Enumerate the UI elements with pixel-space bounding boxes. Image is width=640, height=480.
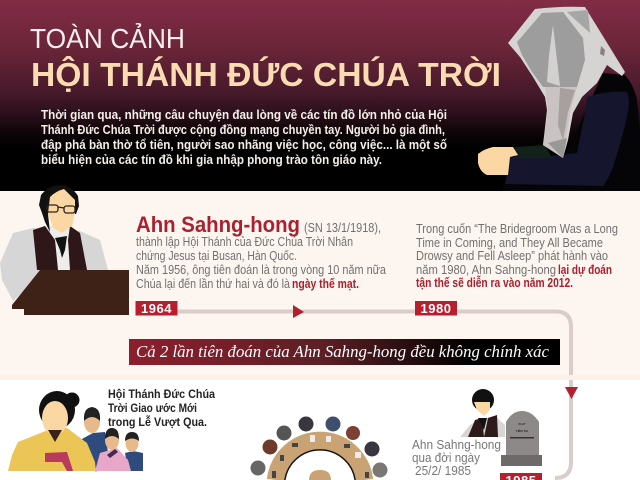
illustration: Ahn Sahng-hong bust: [460, 389, 505, 437]
year tag: 1980: 1980: [421, 301, 451, 316]
man left: [80, 407, 108, 472]
text block: 1980 prediction: lại dự đoán: [558, 263, 612, 277]
title: first line: TOÀN CẢNH: [30, 22, 185, 54]
text block: Passover covenant: Trời Giao ước Mới: [108, 401, 197, 415]
arrow: down: [565, 387, 578, 399]
text block: Ahn Sahng-hong: chứng Jesus tại Busan, Hàn Quốc.: [136, 249, 297, 263]
woman yellow: [8, 391, 96, 471]
text block: Ahn Sahng-hong: Ahn Sahng-hong: [136, 212, 300, 237]
man right: [125, 432, 143, 471]
intro text block: [41, 108, 447, 167]
text block: Ahn Sahng-hong: Chúa lại đến lần thứ hai và đó là: [136, 277, 290, 291]
text block: 1980 prediction: tận thế sẽ diễn ra vào năm 2012.: [416, 275, 573, 290]
text block: 1980 prediction: [416, 222, 618, 290]
intro text block: đập phá bàn thờ tổ tiên, người sao nhãng việc học, công việc... là một số: [41, 138, 447, 152]
intro text block: biểu hiện của các tín đồ khi gia nhập phong trào tôn giáo này.: [41, 153, 382, 167]
illustration: congregation in hanbok: [8, 391, 143, 472]
text block: 1980 prediction: năm 1980, Ahn Sahng-hong: [416, 263, 556, 277]
girl: [95, 428, 131, 471]
icon: tombstone: R.I.P: [519, 422, 525, 426]
text block: 1980 prediction: Time in Coming, and They All Became: [416, 236, 603, 250]
text block: death date: qua đời ngày: [412, 450, 480, 465]
text block: Ahn Sahng-hong: Năm 1956, ông tiên đoán là trong vòng 10 năm nữa: [136, 263, 386, 277]
intro text block: Thánh Đức Chúa Trời được cộng đồng mạng chuyền tay. Người bỏ gia đình,: [41, 123, 445, 137]
title: main heading: HỘI THÁNH ĐỨC CHÚA TRỜI: [31, 55, 501, 93]
divider band: [0, 375, 640, 380]
intro text block: Thời gian qua, những câu chuyện đau lòng về các tín đồ lớn nhỏ của Hội: [41, 108, 447, 122]
text block: Ahn Sahng-hong: (SN 13/1/1918),: [304, 221, 381, 235]
arrow: right: [293, 305, 304, 318]
text block: Passover covenant: [108, 387, 215, 429]
text block: Passover covenant: trong Lễ Vượt Qua.: [108, 414, 207, 429]
text block: 1980 prediction: Trong cuốn “The Bridegroom Was a Long: [416, 222, 618, 236]
text block: Ahn Sahng-hong: [136, 212, 386, 291]
timeline connector: [177, 305, 571, 478]
text block: death date: 25/2/ 1985: [415, 463, 471, 478]
icon: tombstone: [501, 411, 542, 466]
banner: conclusion: Cả 2 lần tiên đoán của Ahn Sahng-hong đều không chính xác: [136, 342, 549, 361]
illustration: Ahn Sahng-hong at podium: [0, 185, 129, 315]
text block: 1980 prediction: Drowsy and Fell Asleep” phát hành vào: [416, 249, 608, 263]
text block: Ahn Sahng-hong: ngày thế mạt.: [292, 277, 359, 291]
icon: tombstone: TIÊN TAI: [516, 428, 528, 433]
year tag: 1964: 1964: [141, 301, 172, 316]
text block: Passover covenant: Hội Thánh Đức Chúa: [108, 387, 215, 401]
text block: death date: [412, 437, 501, 478]
text block: Ahn Sahng-hong: thành lập Hội Thánh của Đức Chúa Trời Nhân: [136, 235, 353, 249]
text block: death date: Ahn Sahng-hong: [412, 437, 501, 452]
illustration: round table: [250, 416, 388, 480]
icon: veiled believer: [478, 7, 640, 191]
